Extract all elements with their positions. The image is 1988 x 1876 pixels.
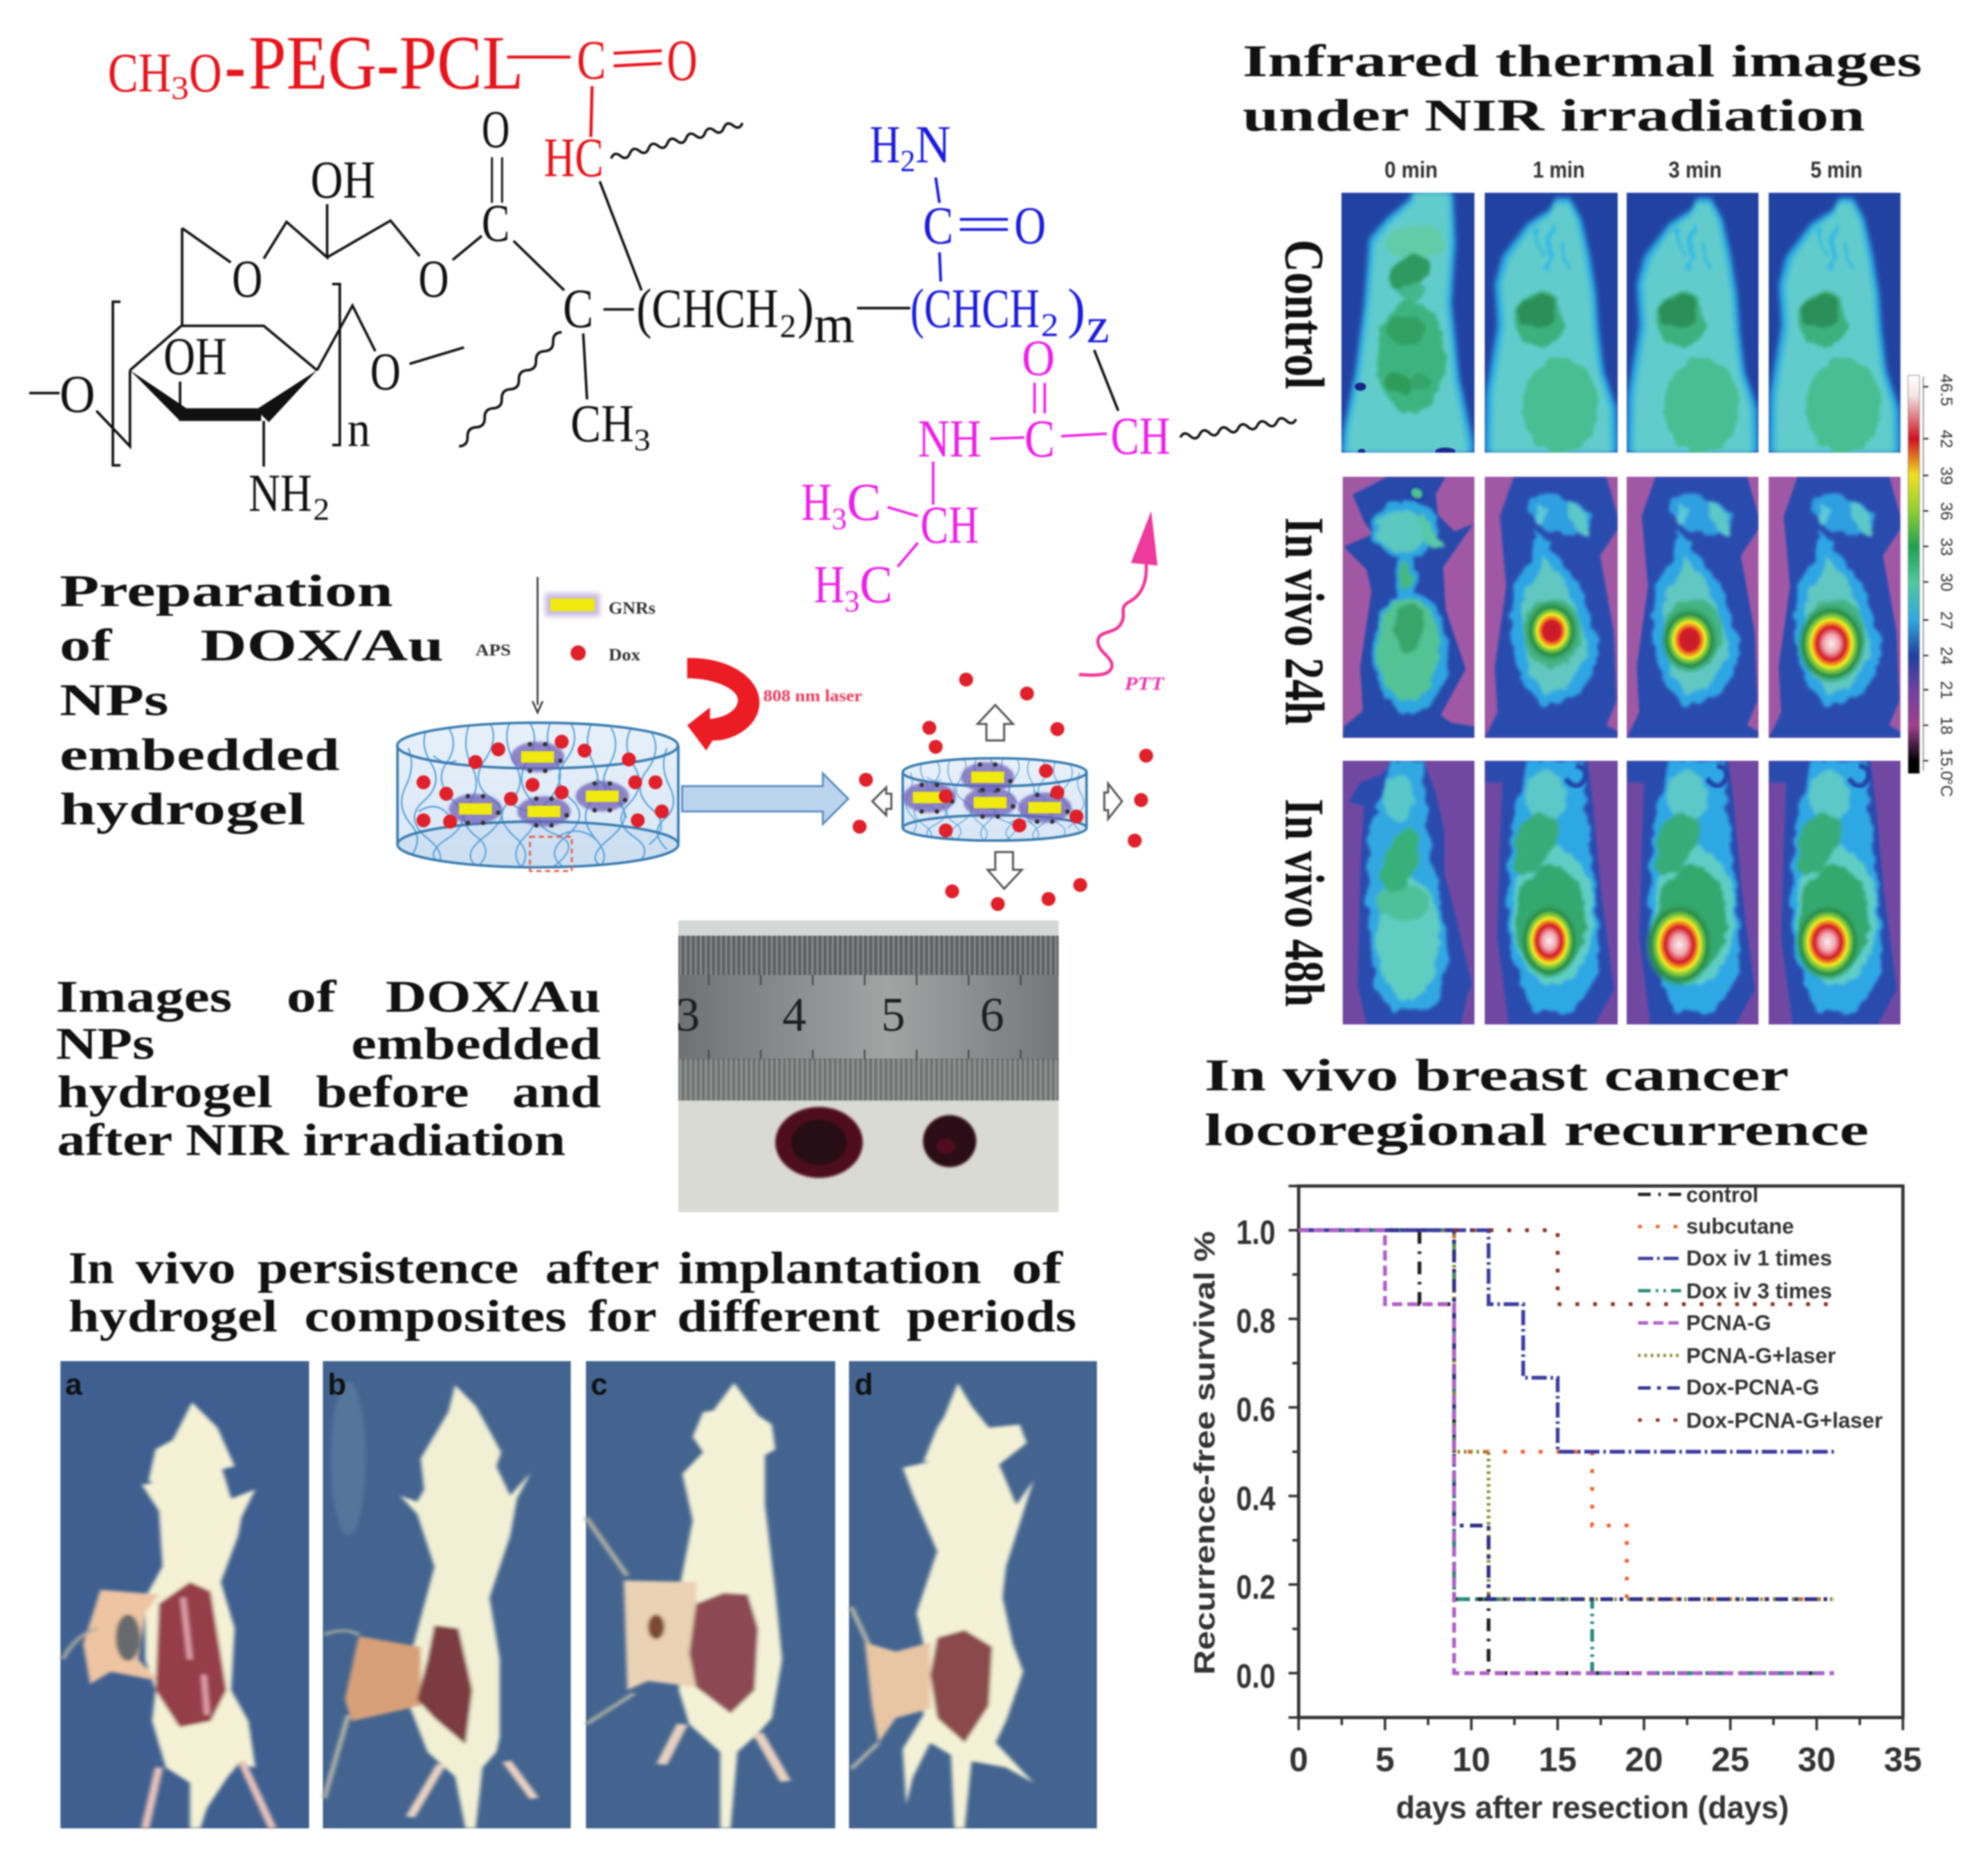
- y axis labels: 0.4: [1236, 1479, 1276, 1517]
- chem: red PEG-PCL chain: HC: [544, 127, 604, 189]
- legend: [1638, 1182, 1883, 1432]
- arrow: APS addition: [532, 577, 543, 712]
- x axis labels: 15: [1539, 1741, 1577, 1779]
- colour scale bar: 39: [1937, 467, 1955, 485]
- legend: Dox iv 3 times: [1686, 1279, 1832, 1304]
- arrow: 808 nm laser curved: [687, 658, 759, 750]
- panel: hydrogel release diagram: [397, 511, 1165, 911]
- photo d: d: [854, 1369, 873, 1401]
- chem: magenta isopropylamide unit: 3: [832, 502, 847, 536]
- chem: red PEG-PCL chain: 3: [171, 71, 189, 107]
- column headers: 1 min: [1533, 156, 1585, 182]
- colour scale bar: 24: [1937, 647, 1955, 665]
- chem: magenta isopropylamide unit: H: [814, 554, 844, 614]
- colour scale bar: [1908, 374, 1955, 797]
- chem: black atom labels: 2: [779, 309, 796, 345]
- y axis labels: 0.8: [1236, 1302, 1276, 1340]
- chem: red PEG-PCL chain: PEG-PCL: [248, 20, 523, 106]
- text: APS: APS: [476, 642, 511, 660]
- chem: red PEG-PCL chain: CH: [108, 42, 171, 104]
- chem: blue amide unit: 2: [1041, 307, 1058, 343]
- chem: blue amide unit: C: [923, 196, 953, 255]
- colour scale bar: 36: [1937, 502, 1955, 521]
- row label: in vivo 24 h: In vivo 24h: [1273, 517, 1335, 725]
- photo c: c: [590, 1369, 608, 1401]
- colour scale bar: 18: [1937, 716, 1955, 734]
- heading: preparation of hydrogel: [60, 566, 444, 835]
- photo: ruler with hydrogel discs: [676, 921, 1058, 1212]
- heading: in vivo persistence: vivo: [136, 1243, 236, 1294]
- legend: Dox: Dox: [608, 644, 640, 665]
- chem: black atom labels: NH: [248, 463, 312, 523]
- heading: images before and after NIR: [56, 972, 601, 1166]
- chem: magenta isopropylamide unit: O: [1022, 330, 1055, 386]
- chem: black atom labels: C: [482, 193, 509, 253]
- heading: images before and after NIR: Images: [56, 972, 232, 1022]
- heading: preparation of hydrogel: NPs: [60, 675, 169, 725]
- photo c: [586, 1361, 835, 1828]
- heading: breast cancer recurrence: locoregional recurrence: [1204, 1105, 1869, 1155]
- heading: in vivo persistence: hydrogel: [69, 1291, 278, 1342]
- heading: in vivo persistence: In: [69, 1243, 114, 1294]
- chem: black atom labels: O: [370, 341, 401, 401]
- chem: black atom labels: O: [60, 364, 95, 424]
- heading: preparation of hydrogel: of: [60, 620, 113, 671]
- thermal row: 48 h: [1343, 761, 1901, 1025]
- open release arrows: [872, 705, 1122, 889]
- chem: black atom labels: m: [814, 295, 855, 354]
- x axis labels: [1289, 1741, 1922, 1779]
- colour scale bar: 30: [1937, 573, 1955, 591]
- chem: black atom labels: O: [418, 249, 449, 309]
- row label: control: Control: [1273, 240, 1335, 389]
- chem: black atom labels: O: [232, 249, 262, 309]
- plot frame and ticks: [1288, 1186, 1903, 1730]
- x axis labels: 0: [1289, 1741, 1308, 1779]
- colour scale bar: 27: [1937, 611, 1955, 629]
- photo: ruler with hydrogel discs: 5: [881, 989, 905, 1042]
- heading: images before and after NIR: NPs: [56, 1018, 154, 1069]
- thermal row: 24 h: [1343, 477, 1901, 738]
- column headers: 0 min: [1384, 156, 1438, 182]
- chem: black atom labels: O: [482, 99, 509, 159]
- chem: blue amide unit: H: [870, 114, 900, 174]
- heading: in vivo persistence: for: [588, 1291, 657, 1342]
- chem: blue amide unit: z: [1087, 298, 1110, 354]
- colour scale bar: °C: [1937, 779, 1955, 797]
- chem: blue amide unit: N: [915, 114, 951, 174]
- chart: recurrence-free survival: [1189, 1182, 1922, 1825]
- legend: subcutane: [1686, 1214, 1794, 1238]
- heading: preparation of hydrogel: Preparation: [60, 566, 393, 616]
- y axis title: Recurrence-free survival %: [1189, 1231, 1221, 1675]
- heading: in vivo persistence: persistence: [257, 1243, 518, 1294]
- y axis labels: 0.2: [1236, 1569, 1276, 1607]
- chem: red PEG-PCL chain: O: [189, 42, 222, 104]
- released Dox dots: [853, 673, 1153, 911]
- heading: preparation of hydrogel: hydrogel: [60, 784, 305, 835]
- heading: in vivo persistence: [69, 1243, 1076, 1342]
- chem: magenta isopropylamide unit: [802, 330, 1171, 618]
- chem: black atom labels: OH: [163, 326, 227, 386]
- colour scale bar: 33: [1937, 538, 1955, 556]
- heading: infrared thermal images: under NIR irradiation: [1242, 91, 1865, 141]
- x axis labels: 25: [1711, 1741, 1749, 1779]
- chem: magenta isopropylamide unit: CH: [1111, 406, 1171, 466]
- x axis title: days after resection (days): [1396, 1789, 1789, 1825]
- column headers: [1384, 156, 1863, 182]
- survival curves: [1299, 1230, 1834, 1673]
- small shrunken hydrogel cylinder: [903, 758, 1087, 847]
- chem: black atom labels: n: [347, 402, 370, 458]
- chem: blue amide unit: O: [1014, 196, 1046, 255]
- row label: in vivo 48 h: In vivo 48h: [1273, 799, 1335, 1007]
- heading: infrared thermal images: [1242, 36, 1922, 141]
- heading: in vivo persistence: of: [1012, 1243, 1063, 1294]
- x axis labels: 35: [1884, 1741, 1922, 1779]
- y axis labels: 0.6: [1236, 1391, 1276, 1429]
- heading: images before and after NIR: and: [512, 1067, 601, 1117]
- chem: black atom labels: ): [797, 278, 814, 340]
- x axis labels: 30: [1798, 1741, 1836, 1779]
- photo b: b: [327, 1369, 346, 1401]
- large hydrogel cylinder: [397, 723, 678, 877]
- chem: blue amide unit: ): [1067, 278, 1085, 340]
- heading: infrared thermal images: Infrared thermal images: [1242, 36, 1922, 87]
- photo b: [323, 1361, 571, 1828]
- column headers: 3 min: [1668, 156, 1722, 182]
- chem: black atom labels: 3: [634, 423, 651, 457]
- heading: images before and after NIR: after NIR irradiation: [57, 1115, 566, 1166]
- heading: images before and after NIR: DOX/Au: [386, 972, 601, 1022]
- column headers: 5 min: [1811, 156, 1863, 182]
- chem: black atom labels: [60, 99, 855, 527]
- legend: PCNA-G+laser: [1686, 1344, 1836, 1368]
- heading: in vivo persistence: different: [677, 1291, 880, 1342]
- chem: black atom labels: C: [563, 278, 593, 340]
- heading: in vivo persistence: implantation: [678, 1243, 982, 1294]
- chem: magenta isopropylamide unit: C: [847, 472, 881, 532]
- legend: PCNA-G: [1686, 1310, 1771, 1335]
- heading: images before and after NIR: embedded: [351, 1018, 601, 1069]
- legend: Dox-PCNA-G: [1686, 1376, 1819, 1400]
- heading: breast cancer recurrence: [1204, 1050, 1869, 1155]
- chem: magenta isopropylamide unit: 3: [844, 584, 860, 618]
- legend: Dox: [570, 644, 640, 665]
- photo d: [849, 1361, 1097, 1828]
- x axis labels: 20: [1625, 1741, 1663, 1779]
- heading: in vivo persistence: periods: [907, 1291, 1076, 1342]
- photo: ruler with hydrogel discs: 6: [980, 989, 1004, 1042]
- chem: black atom labels: CH: [570, 393, 634, 453]
- chem: magenta isopropylamide unit: H: [802, 472, 832, 532]
- y axis labels: 1.0: [1236, 1214, 1276, 1252]
- text: PTT: PTT: [1124, 673, 1165, 694]
- chem: magenta isopropylamide unit: NH: [918, 408, 982, 468]
- chem: red PEG-PCL chain: O: [667, 28, 697, 93]
- heading: preparation of hydrogel: DOX/Au: [200, 620, 444, 671]
- chem: blue amide unit: [870, 114, 1110, 354]
- y axis labels: [1236, 1214, 1276, 1695]
- colour scale bar: 15.0: [1937, 748, 1955, 780]
- heading: breast cancer recurrence: In vivo breast cancer: [1204, 1050, 1789, 1101]
- arrow: photothermal wave: [1079, 511, 1157, 675]
- chem: red PEG-PCL chain: [108, 20, 697, 189]
- photo a: a: [65, 1369, 82, 1401]
- legend: Dox-PCNA-G+laser: [1686, 1408, 1883, 1432]
- chem: black backbone bonds: [29, 123, 1296, 467]
- panel: chemical structure: [29, 20, 1296, 618]
- x axis labels: 10: [1452, 1741, 1490, 1779]
- chem: red PEG-PCL chain: C: [577, 30, 606, 91]
- colour scale bar: 21: [1937, 681, 1955, 699]
- legend: control: [1686, 1182, 1758, 1207]
- chem: sugar ring wedges: [130, 370, 317, 422]
- chem: black atom labels: OH: [311, 150, 375, 210]
- heading: in vivo persistence: after: [545, 1243, 659, 1294]
- heading: images before and after NIR: hydrogel: [57, 1067, 273, 1117]
- legend: Dox iv 1 times: [1686, 1246, 1832, 1270]
- text: 808 nm laser: 808 nm laser: [763, 687, 862, 705]
- x axis labels: 5: [1375, 1741, 1395, 1779]
- photo: ruler with hydrogel discs: 4: [782, 989, 806, 1042]
- heading: images before and after NIR: before: [316, 1067, 469, 1117]
- chem: blue amide unit: 2: [900, 144, 915, 178]
- legend: GNRs: [545, 593, 656, 617]
- panel: infrared thermal images: [1273, 156, 1955, 1025]
- photo: ruler with hydrogel discs: 3: [676, 989, 700, 1042]
- chem: magenta isopropylamide unit: C: [860, 554, 892, 614]
- chem: magenta isopropylamide unit: C: [1024, 408, 1055, 468]
- chem: blue amide unit: (CHCH: [910, 278, 1040, 340]
- panel: mouse implantation photographs: [60, 1361, 1097, 1828]
- chem: black atom labels: 2: [313, 491, 329, 527]
- y axis labels: 0.0: [1236, 1657, 1276, 1695]
- heading: preparation of hydrogel: embedded: [60, 730, 340, 780]
- legend: GNRs: GNRs: [608, 597, 656, 617]
- heading: images before and after NIR: of: [287, 972, 337, 1022]
- colour scale bar: 46.5: [1937, 374, 1955, 406]
- heading: in vivo persistence: composites: [305, 1291, 567, 1342]
- colour scale bar: 42: [1937, 430, 1955, 448]
- chem: magenta isopropylamide unit: CH: [921, 495, 979, 554]
- chem: black atom labels: (CHCH: [636, 278, 779, 340]
- arrow: transition to shrunken gel: [682, 773, 848, 824]
- photo a: [60, 1361, 309, 1828]
- thermal row: control: [1341, 192, 1901, 456]
